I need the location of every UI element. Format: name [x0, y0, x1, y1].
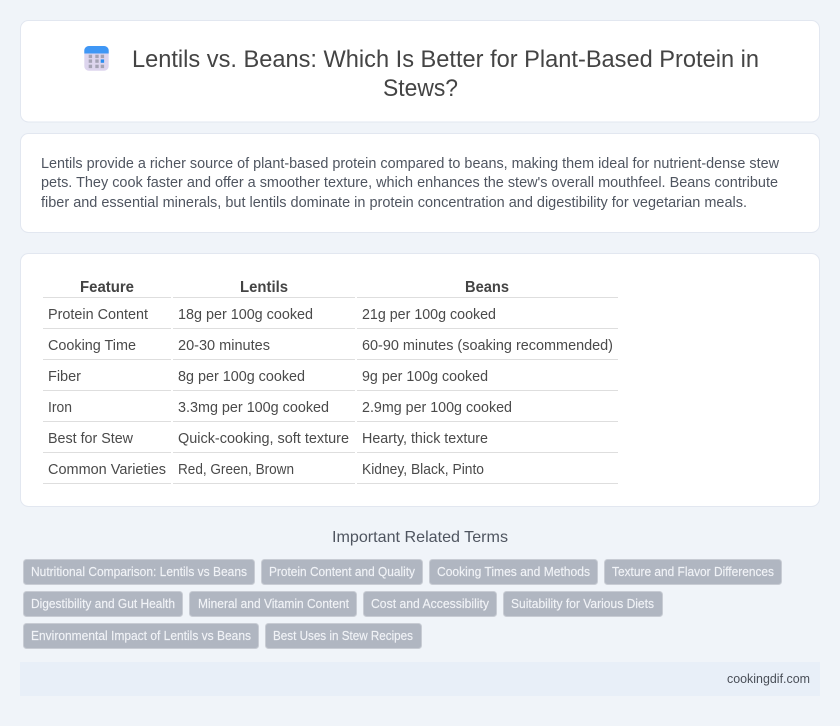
- table header: [43, 279, 618, 298]
- panel: intro text: [20, 134, 820, 232]
- row: protein content: [43, 307, 618, 329]
- row: protein content: 18g per 100g cooked: [178, 307, 313, 323]
- tag: Suitability for Various Diets: [511, 596, 654, 611]
- title: Lentils vs. Beans: Which Is Better for Plant-Based Protein in: [132, 46, 759, 73]
- row: common varieties: Red, Green, Brown: [178, 462, 294, 478]
- footer: [20, 662, 820, 696]
- tags: related terms: [24, 560, 782, 648]
- tag: Cost and Accessibility: [371, 596, 489, 611]
- panel: header: [20, 20, 820, 122]
- table header: Beans: [465, 279, 509, 296]
- tag: [364, 592, 496, 616]
- row: iron: Iron: [48, 400, 72, 416]
- text block: summary: Lentils provide a richer source of plant-based protein compared to beans, making them ideal for nutrient-dense stew: [41, 156, 780, 172]
- row: fiber: Fiber: [48, 369, 81, 385]
- row: cooking time: Cooking Time: [48, 338, 136, 354]
- table header: Lentils: [240, 279, 288, 296]
- tag: [24, 624, 258, 648]
- tag: Protein Content and Quality: [269, 564, 415, 579]
- tag: [24, 560, 254, 584]
- tag: [24, 592, 182, 616]
- row: fiber: 8g per 100g cooked: [178, 369, 305, 385]
- tag: [430, 560, 598, 584]
- row: cooking time: 60-90 minutes (soaking recommended): [362, 338, 613, 354]
- tag: [504, 592, 662, 616]
- title: Stews?: [383, 75, 458, 102]
- row: fiber: 9g per 100g cooked: [362, 369, 488, 385]
- row: fiber: [43, 369, 618, 391]
- row: best for stew: Hearty, thick texture: [362, 431, 488, 447]
- row: cooking time: 20-30 minutes: [178, 338, 270, 354]
- row: best for stew: Best for Stew: [48, 431, 134, 447]
- text block: summary: pets. They cook faster and offer a smoother texture, which enhances the stew's overall mouthfeel. Beans contribute: [41, 175, 778, 191]
- tag: Digestibility and Gut Health: [31, 596, 175, 611]
- tag: Cooking Times and Methods: [437, 564, 590, 579]
- row: cooking time: [43, 338, 618, 360]
- tag: Environmental Impact of Lentils vs Beans: [31, 628, 251, 643]
- row: protein content: 21g per 100g cooked: [362, 307, 496, 323]
- title: [132, 46, 759, 102]
- row: best for stew: Quick-cooking, soft texture: [178, 431, 349, 447]
- tag: [190, 592, 356, 616]
- table header: Feature: [80, 279, 134, 296]
- tag: Texture and Flavor Differences: [612, 564, 774, 579]
- tag: Best Uses in Stew Recipes: [273, 628, 413, 643]
- heading: related terms: Important Related Terms: [332, 529, 508, 546]
- tag: [266, 624, 422, 648]
- row: common varieties: Kidney, Black, Pinto: [362, 462, 484, 478]
- panel: comparison table: [20, 254, 820, 506]
- row: common varieties: Common Varieties: [48, 462, 166, 478]
- text block: summary: [41, 156, 780, 211]
- row: iron: 2.9mg per 100g cooked: [362, 400, 512, 416]
- footer: cookingdif.com: [727, 671, 810, 686]
- tag: [262, 560, 422, 584]
- row: best for stew: [43, 431, 618, 453]
- tag: Nutritional Comparison: Lentils vs Beans: [31, 564, 247, 579]
- row: protein content: Protein Content: [48, 307, 148, 323]
- row: iron: 3.3mg per 100g cooked: [178, 400, 329, 416]
- tag: [604, 560, 782, 584]
- tag: Mineral and Vitamin Content: [198, 596, 349, 611]
- row: iron: [43, 400, 618, 422]
- icon: calendar: [84, 46, 109, 71]
- row: common varieties: [43, 462, 618, 484]
- text block: summary: fiber and essential minerals, but lentils dominate in protein concentration and digestibility for vegetarian meals.: [41, 195, 747, 211]
